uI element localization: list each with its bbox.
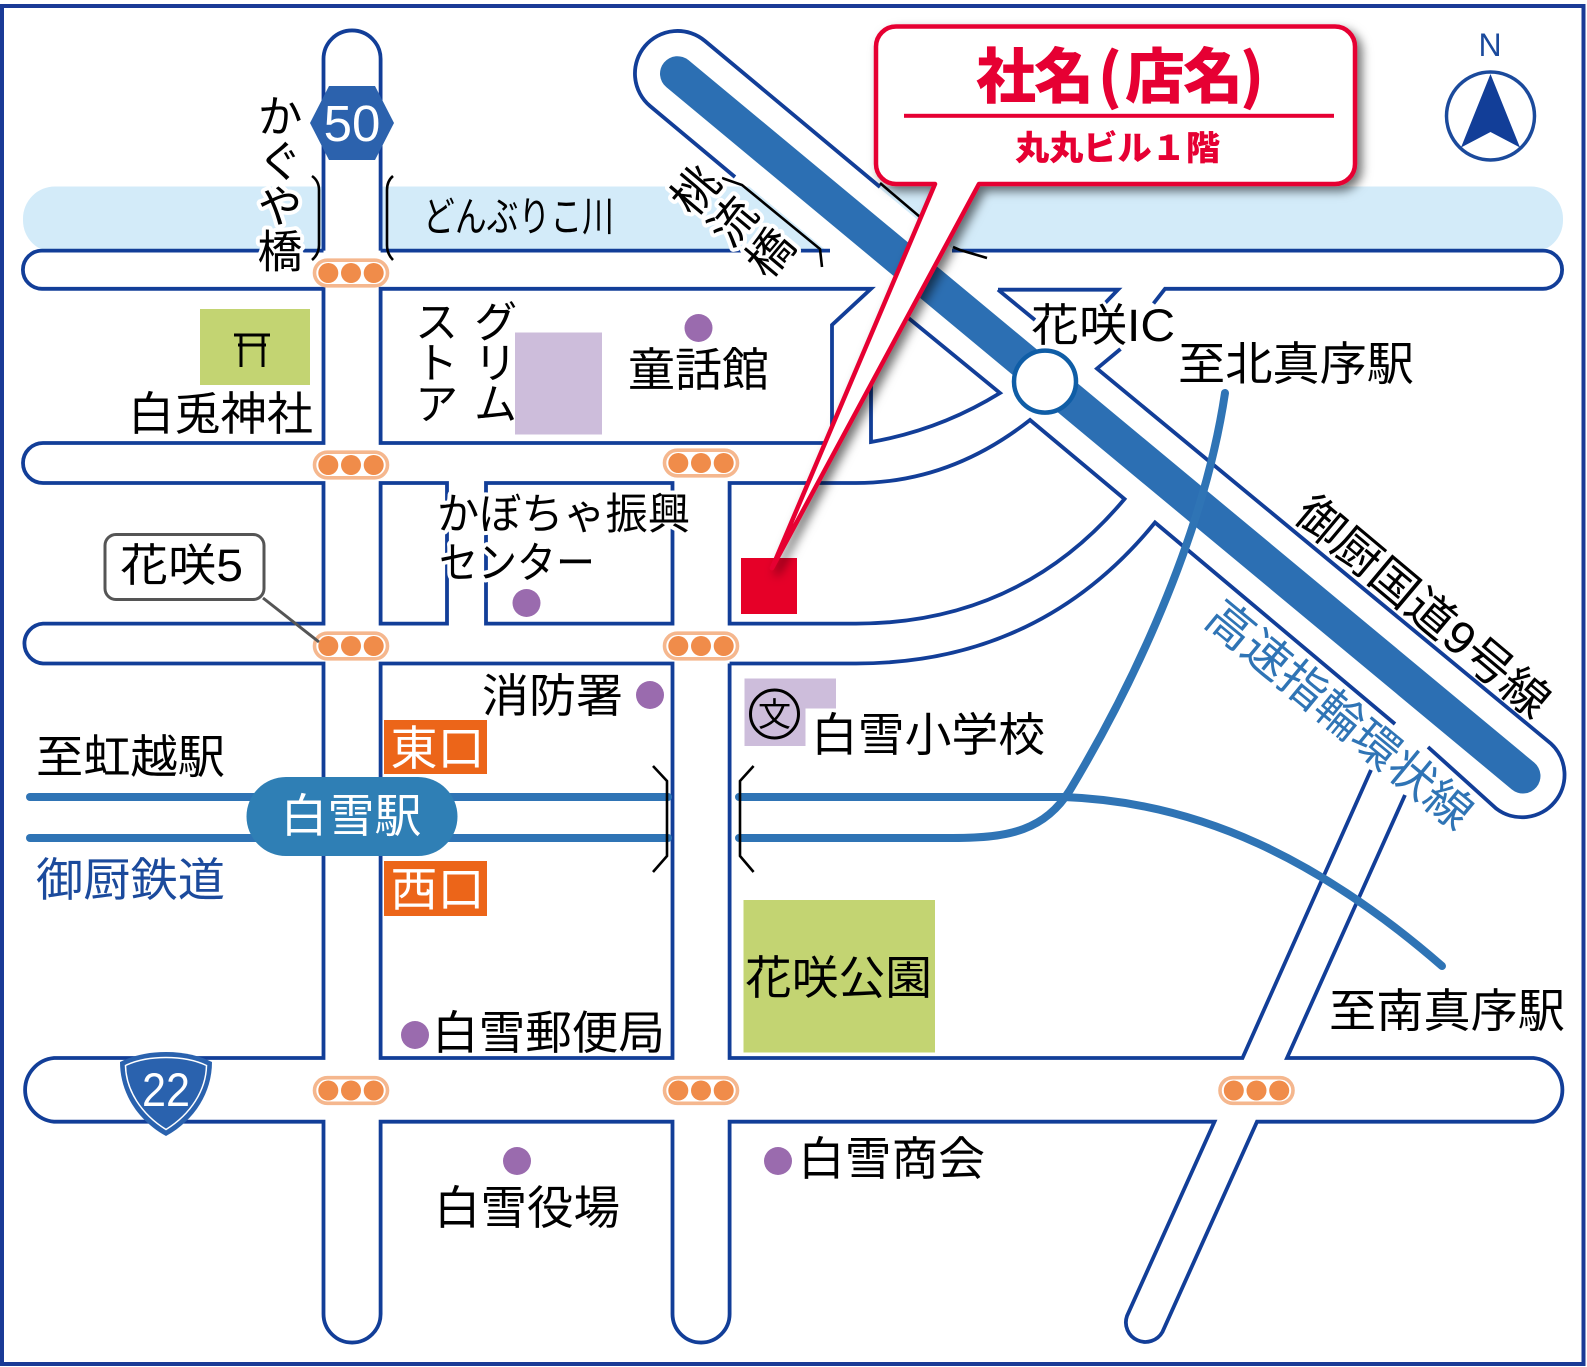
traffic signals	[314, 260, 1293, 1103]
label: 御厨国道9号線: 御厨国道9号線	[1286, 486, 1560, 728]
east exit: 東口: 東口	[390, 722, 484, 775]
building: グリムストア	[515, 332, 602, 434]
highway white casing	[25, 74, 1561, 776]
destination building red square	[741, 558, 797, 614]
route shield 22: 22	[142, 1063, 190, 1116]
dot: 白雪郵便局	[401, 1021, 429, 1049]
label: 消防署: 消防署	[482, 670, 623, 722]
icon: school mark 文	[750, 690, 798, 738]
label: ストア: ストア	[408, 299, 456, 422]
north arrow: N	[1478, 27, 1502, 63]
label: 白雪郵便局: 白雪郵便局	[432, 1007, 665, 1059]
label: どんぶりこ川: どんぶりこ川	[423, 194, 614, 240]
label: 至北真序駅: 至北真序駅	[1178, 338, 1414, 390]
school building	[744, 678, 836, 746]
label: かぼちゃ振興センター: センター	[439, 540, 595, 588]
dot: 白雪役場	[503, 1147, 531, 1175]
railway bridge marks	[653, 766, 754, 872]
park: 花咲公園: 花咲公園	[745, 952, 932, 1004]
railway: 御厨鉄道	[30, 393, 1442, 966]
shrine green area with torii icon	[200, 309, 310, 385]
signpost: 花咲5	[105, 534, 319, 642]
national highway 9 band	[678, 74, 1523, 776]
dot: かぼちゃ振興センター	[512, 589, 540, 617]
west exit: 西口: 西口	[390, 863, 484, 916]
label: 花咲IC: 花咲IC	[1031, 300, 1175, 351]
route sign 50	[310, 86, 394, 160]
station: 白雪駅	[246, 777, 458, 856]
river: どんぶりこ川	[23, 186, 1563, 252]
route shield 22	[120, 1052, 212, 1136]
icon: school mark 文: 文	[758, 696, 791, 733]
label: 至南真序駅: 至南真序駅	[1329, 985, 1565, 1037]
label: 白雪商会: 白雪商会	[798, 1133, 985, 1185]
bridge marks: 桃流橋	[722, 178, 987, 267]
bridge marks: かぐや橋	[312, 176, 393, 260]
label: 童話館: 童話館	[628, 344, 769, 396]
label: 高速指輪環状線: 高速指輪環状線	[1196, 590, 1483, 840]
dot: 白雪商会	[764, 1147, 792, 1175]
station: 白雪駅: 白雪駅	[280, 790, 422, 842]
callout: company name	[772, 26, 1355, 568]
callout subtitle: 丸丸ビル１階	[1015, 121, 1220, 170]
north arrow	[1446, 27, 1534, 160]
callout title: 社名(店名)	[976, 29, 1264, 116]
dot: 童話館	[684, 314, 712, 342]
callout divider	[904, 114, 1334, 118]
dot: 消防署	[636, 681, 664, 709]
interchange circle: 花咲IC	[1014, 351, 1076, 413]
label: 白雪小学校: 白雪小学校	[811, 709, 1045, 761]
route sign 50: 50	[324, 95, 380, 152]
label: かぼちゃ振興センター	[437, 491, 690, 588]
label: かぐや橋: かぐや橋	[250, 93, 302, 273]
label: 白兎神社: 白兎神社	[128, 388, 313, 440]
signpost: 花咲5: 花咲5	[120, 540, 243, 591]
label: 桃流橋: 桃流橋	[659, 157, 804, 291]
label: かぼちゃ振興センター: かぼちゃ振興	[437, 491, 690, 539]
label: 至虹越駅: 至虹越駅	[36, 731, 225, 783]
label: グリム: グリム	[466, 299, 516, 422]
park: 花咲公園	[744, 900, 935, 1052]
label: 御厨鉄道: 御厨鉄道	[36, 854, 225, 906]
label: 白雪役場: 白雪役場	[434, 1182, 620, 1234]
